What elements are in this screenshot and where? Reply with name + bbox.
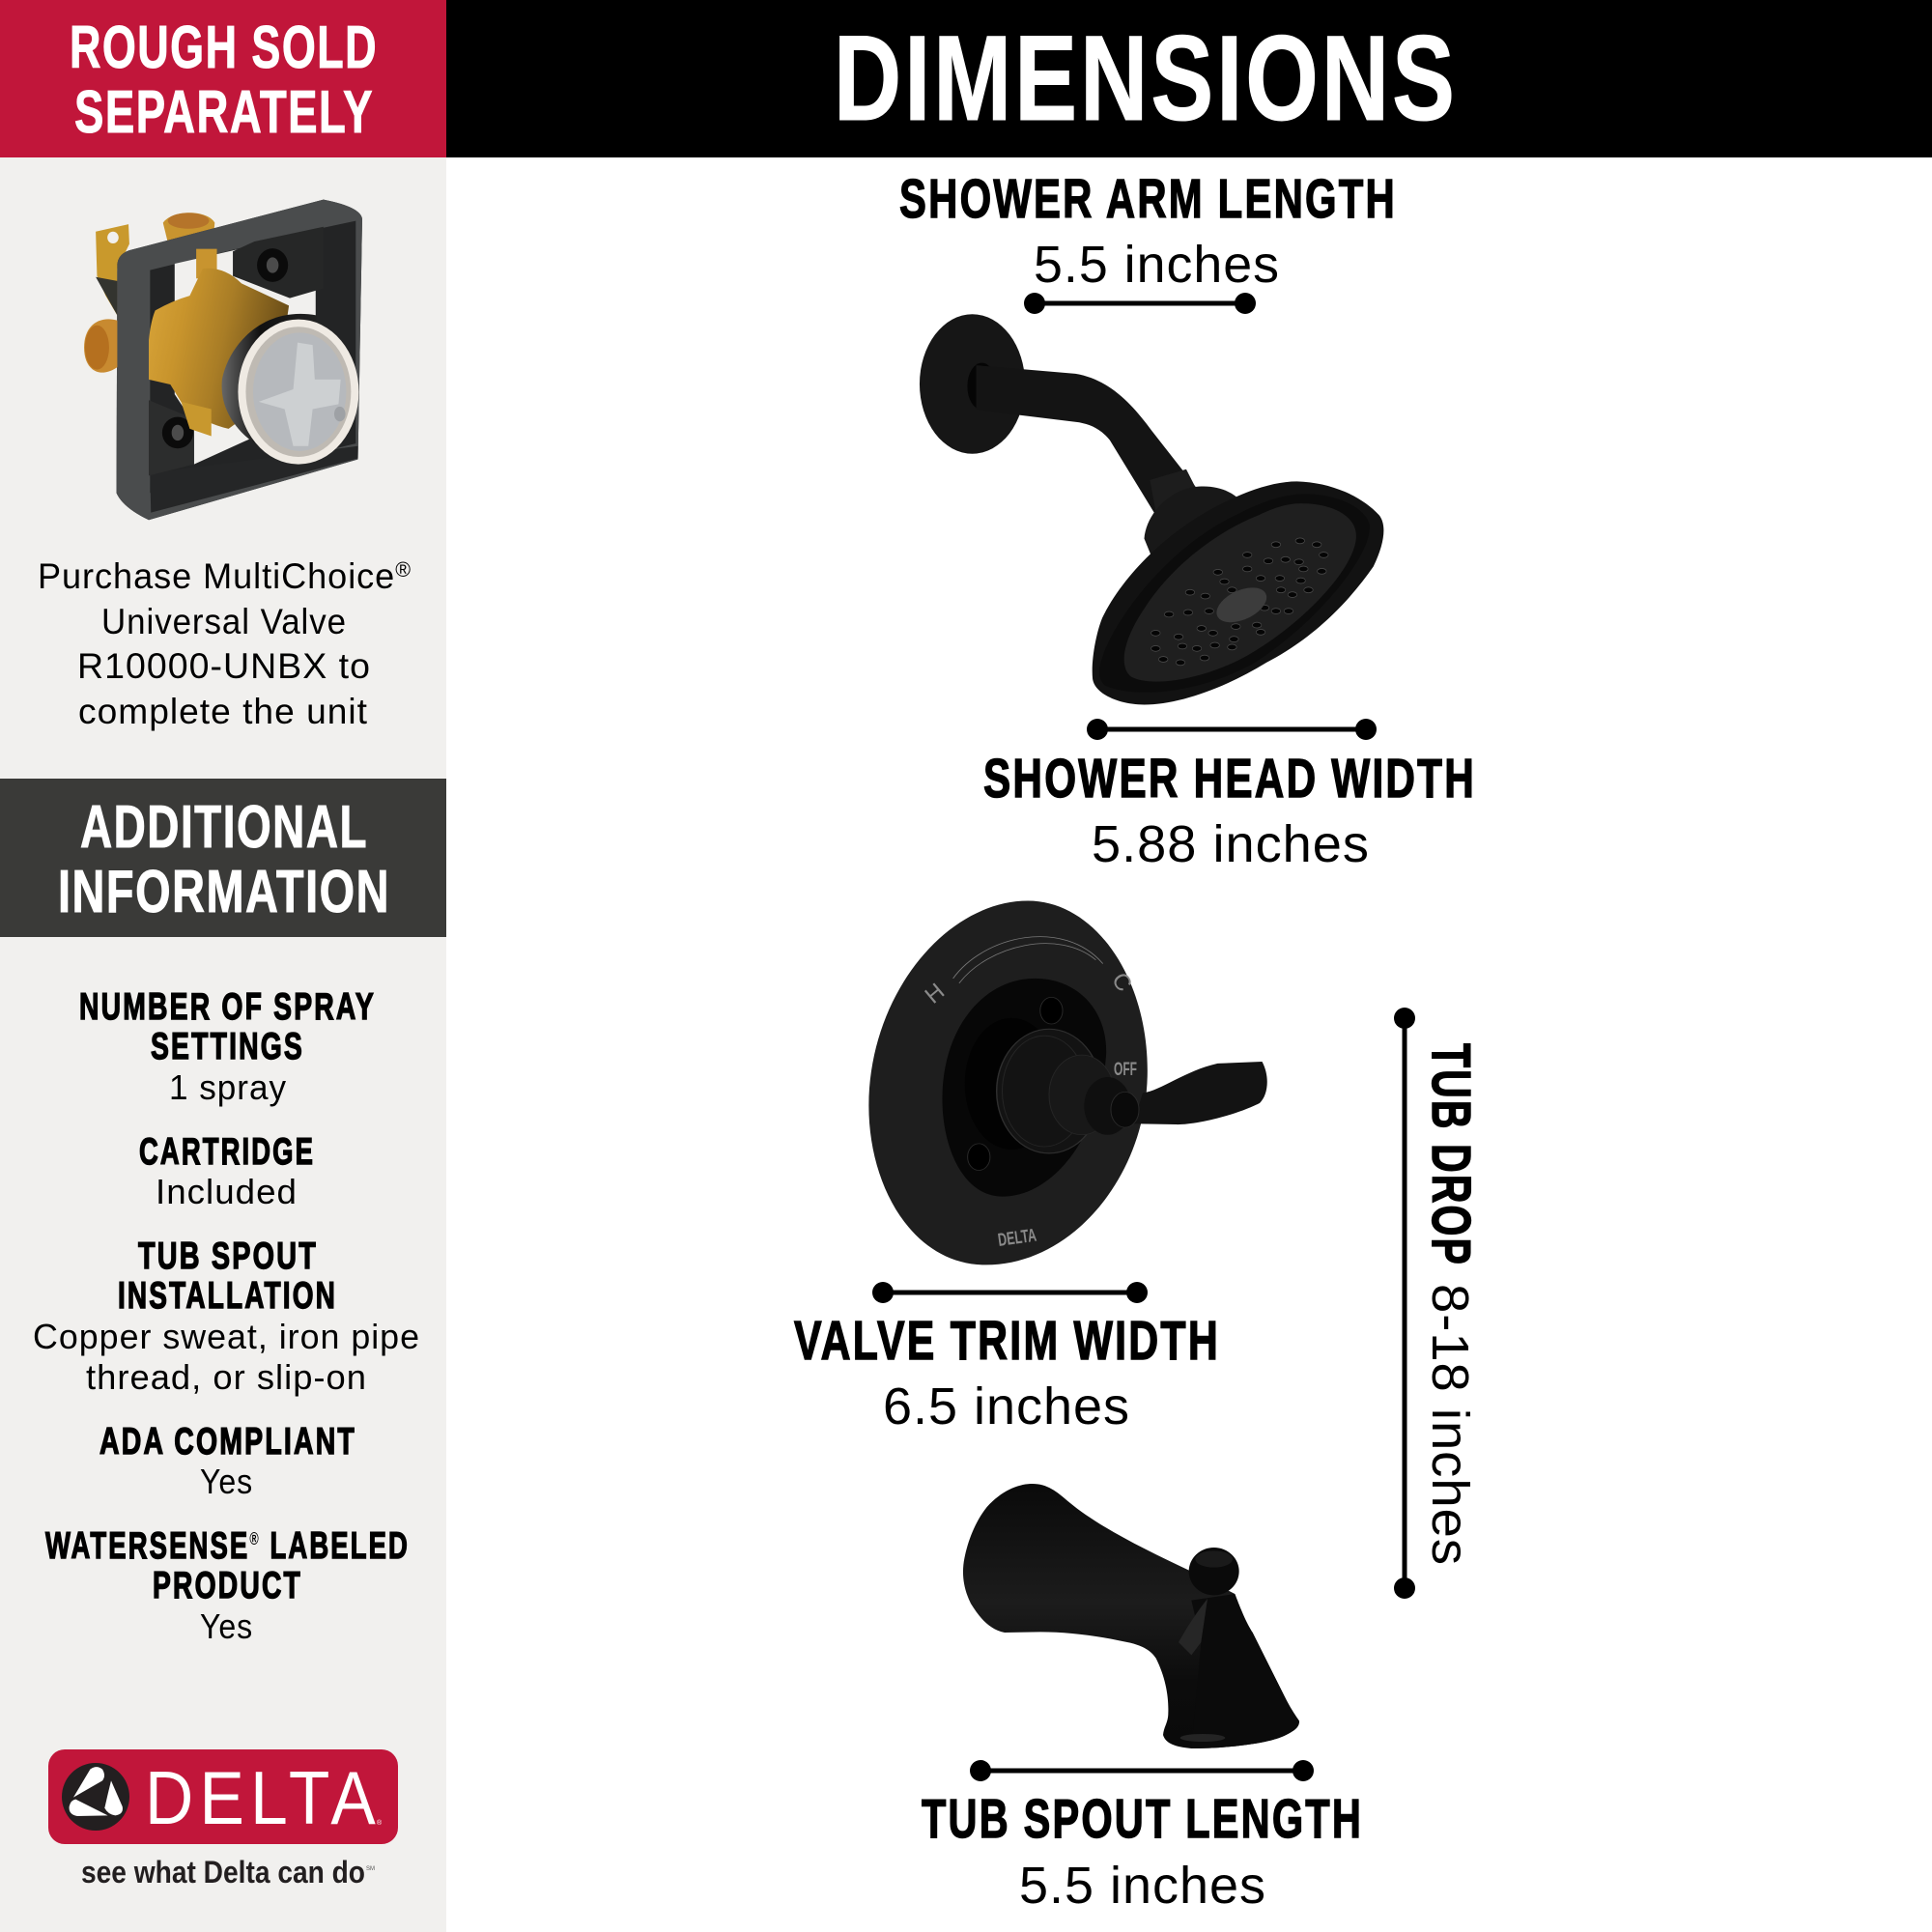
text: purchase note: ® <box>395 557 412 582</box>
text: purchase note: Universal Valve <box>101 602 347 641</box>
logo: delta: DELTA <box>145 1755 382 1840</box>
spec: tub spout installation: TUB SPOUT <box>138 1236 318 1277</box>
spec: watersense labeled product: LABELED <box>261 1525 410 1567</box>
label: tub spout length: 5.5 inches <box>1019 1857 1266 1915</box>
spec: number of spray settings: SETTINGS <box>151 1026 304 1067</box>
text: purchase note: complete the unit <box>78 692 368 731</box>
panel: sidebar background <box>0 157 446 1932</box>
image: valve trim <box>868 901 1267 1264</box>
label: tub drop: 8-18 inches <box>1421 1284 1479 1566</box>
banner: dimensions title <box>446 0 1932 157</box>
label: shower arm length: 5.5 inches <box>1034 236 1280 294</box>
banner: rough sold separately: ROUGH SOLD <box>70 14 378 81</box>
label: tub spout length: TUB SPOUT LENGTH <box>922 1788 1363 1850</box>
spec: number of spray settings <box>79 986 376 1107</box>
label: shower head width: 5.88 inches <box>1092 815 1370 873</box>
spec: tub spout installation: INSTALLATION <box>118 1275 337 1317</box>
dimension line: tub spout <box>970 1760 1314 1781</box>
image: rough-in valve <box>84 200 362 520</box>
heading: additional information: ADDITIONAL <box>80 794 368 861</box>
label: tub drop: TUB DROP <box>1420 1043 1482 1266</box>
spec: watersense labeled product: Yes <box>200 1606 253 1646</box>
spec: number of spray settings: 1 spray <box>169 1067 287 1107</box>
label: shower arm length: SHOWER ARM LENGTH <box>899 168 1397 230</box>
dimension line: shower arm <box>1024 293 1256 314</box>
spec: tub spout installation: thread, or slip-on <box>86 1357 367 1397</box>
logo: delta: ® <box>377 1819 383 1827</box>
label: shower arm length <box>899 168 1397 294</box>
banner: dimensions title: DIMENSIONS <box>834 12 1458 146</box>
spec: tub spout installation: Copper sweat, iron pipe <box>33 1317 420 1356</box>
dimension line: shower head <box>1087 719 1377 740</box>
label: tub spout length <box>922 1788 1363 1915</box>
banner: rough sold separately: SEPARATELY <box>74 79 374 146</box>
image: tub spout <box>963 1484 1299 1748</box>
heading: additional information <box>0 779 446 937</box>
image: valve trim: C <box>1106 968 1137 997</box>
label: shower head width <box>983 748 1476 873</box>
logo: delta <box>48 1749 398 1844</box>
dimension line: tub drop <box>1394 1008 1415 1599</box>
image: valve trim: OFF <box>1114 1060 1137 1080</box>
image: shower head and arm <box>920 314 1383 705</box>
spec: cartridge <box>139 1131 315 1211</box>
spec: ada compliant: ADA COMPLIANT <box>99 1421 356 1463</box>
banner: rough sold separately <box>0 0 446 157</box>
label: valve trim width: VALVE TRIM WIDTH <box>794 1310 1220 1372</box>
text: purchase note: Purchase MultiChoice <box>38 556 405 596</box>
spec: watersense labeled product <box>45 1525 410 1646</box>
spec: number of spray settings: NUMBER OF SPRAY <box>79 986 376 1028</box>
tagline: SM <box>366 1866 375 1872</box>
label: valve trim width: 6.5 inches <box>883 1378 1130 1435</box>
spec: watersense labeled product: WATERSENSE <box>45 1525 335 1567</box>
spec: watersense labeled product: ® <box>249 1529 261 1548</box>
label: tub drop <box>1420 1043 1482 1566</box>
image: valve trim: H <box>921 979 950 1009</box>
spec: cartridge: CARTRIDGE <box>139 1131 315 1173</box>
image: valve trim: DELTA <box>997 1226 1037 1251</box>
tagline: see what Delta can do <box>81 1855 365 1889</box>
text: purchase note <box>38 556 412 731</box>
label: shower head width: SHOWER HEAD WIDTH <box>983 748 1476 810</box>
spec: ada compliant <box>99 1421 356 1501</box>
spec: ada compliant: Yes <box>200 1462 253 1501</box>
label: valve trim width <box>794 1310 1220 1435</box>
spec: watersense labeled product: PRODUCT <box>153 1565 302 1606</box>
spec: cartridge: Included <box>156 1172 298 1211</box>
heading: additional information: INFORMATION <box>58 859 390 925</box>
dimension line: valve trim <box>872 1282 1148 1303</box>
text: purchase note: R10000-UNBX to <box>77 646 371 686</box>
spec: tub spout installation <box>33 1236 420 1397</box>
